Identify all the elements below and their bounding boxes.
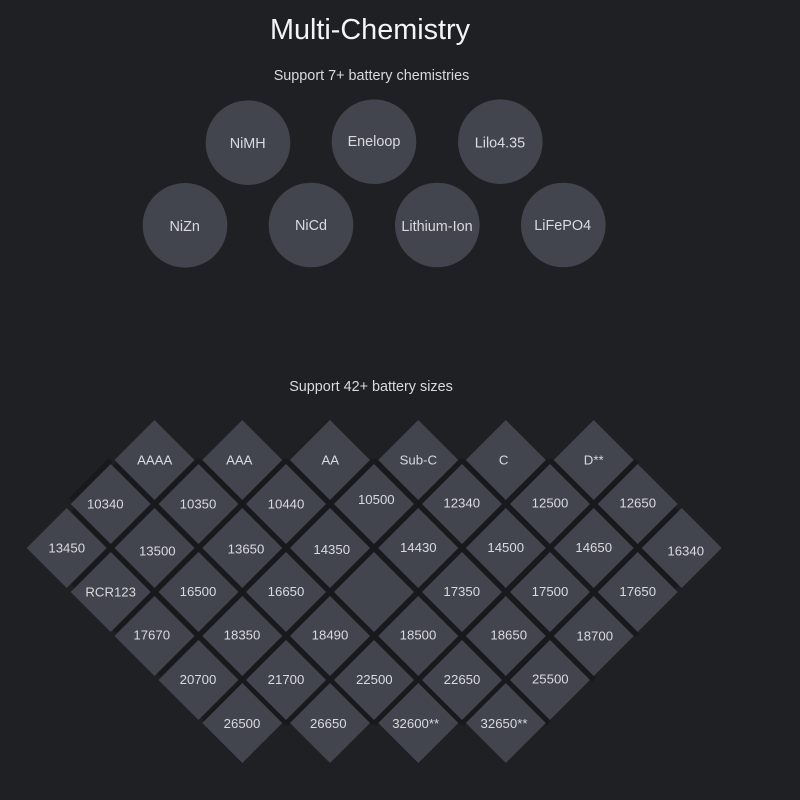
size: 10500: 10500 (358, 492, 395, 507)
size: 16650: 16650 (268, 584, 304, 599)
size: 26650 (290, 683, 370, 763)
size: 18500 (378, 596, 458, 676)
size: 18500: 18500 (400, 628, 436, 642)
size: 16500: 16500 (180, 584, 216, 599)
size: 14350 (290, 508, 370, 588)
size: C (466, 420, 546, 500)
size: 18700 (554, 596, 634, 676)
size: 17650: 17650 (619, 584, 656, 599)
size: 32650**: 32650** (481, 716, 527, 731)
size: 25500: 25500 (532, 672, 569, 686)
title: Multi-Chemistry (270, 14, 471, 46)
circle: NiZn: NiZn (170, 219, 200, 235)
size: AA (290, 420, 370, 500)
panel: battery size diamond grid (27, 420, 722, 763)
size: 18700: 18700 (576, 628, 613, 644)
size: 12650 (598, 464, 678, 544)
size: 10440: 10440 (268, 496, 304, 512)
blank diamond (334, 552, 414, 632)
circle: Lithium-Ion: Lithium-Ion (401, 219, 473, 235)
size: Sub-C: Sub-C (400, 452, 437, 468)
subtitle: sizes: Support 42+ battery sizes (289, 379, 453, 395)
size: 13650: 13650 (228, 542, 264, 556)
size: 10350: 10350 (180, 496, 216, 512)
size: 14650 (554, 508, 634, 588)
size: 10340: 10340 (87, 496, 124, 512)
size: 32600** (378, 683, 458, 763)
size: 13650 (202, 508, 282, 588)
circle: LiFePO4: LiFePO4 (534, 218, 591, 234)
size: AAAA: AAAA (137, 452, 172, 468)
size: 14350: 14350 (313, 542, 350, 557)
circle: Eneloop (332, 99, 416, 184)
size: AAA: AAA (226, 452, 253, 468)
size: 12500 (510, 464, 590, 544)
size: 12340 (422, 464, 502, 544)
size: 10350 (158, 464, 238, 544)
size: 13500 (114, 508, 194, 588)
size: 10340 (71, 464, 151, 544)
size: 21700 (246, 640, 326, 720)
circle: NiZn (143, 183, 227, 268)
size: 32600**: 32600** (392, 716, 439, 731)
size: 17670 (114, 596, 194, 676)
size: 26500 (202, 683, 282, 763)
circle: NiMH: NiMH (230, 136, 266, 152)
size: 18650: 18650 (490, 628, 527, 642)
size: 16650 (246, 552, 326, 632)
circle: Lilo4.35: Lilo4.35 (475, 136, 525, 152)
size: 16500 (158, 552, 238, 632)
size: 22650 (422, 640, 502, 720)
size: 18490 (290, 596, 370, 676)
size: 17500: 17500 (532, 584, 568, 599)
size: 32650** (466, 683, 546, 763)
panel: chemistry circles (143, 99, 606, 268)
size: D** (554, 420, 634, 500)
size: 17650 (598, 552, 678, 632)
subtitle: chemistries: Support 7+ battery chemistries (274, 68, 469, 84)
size: 20700 (158, 640, 238, 720)
size: RCR123: RCR123 (85, 584, 136, 600)
size: 13450 (27, 508, 107, 588)
size: 14430: 14430 (400, 540, 437, 555)
size: 25500 (510, 640, 590, 720)
size: 12500: 12500 (532, 496, 568, 510)
circle: NiCd: NiCd (295, 218, 327, 234)
size: 18350: 18350 (224, 628, 260, 642)
size: C: C (499, 452, 509, 468)
size: 14500: 14500 (487, 540, 524, 555)
size: 17350 (422, 552, 502, 632)
size: 14500 (466, 508, 546, 588)
circle: NiCd (269, 183, 353, 267)
size: 26650: 26650 (310, 716, 347, 731)
size: 18490: 18490 (312, 628, 348, 642)
size: 14430 (378, 508, 458, 588)
size: 26500: 26500 (224, 716, 260, 731)
size: AAAA (114, 420, 194, 500)
size: 22500: 22500 (356, 672, 393, 687)
size: 17350: 17350 (443, 584, 480, 599)
size: 20700: 20700 (180, 672, 216, 687)
size: 16340: 16340 (667, 544, 704, 558)
size: AA: AA (322, 452, 339, 468)
size: 16340 (642, 508, 722, 588)
size: 17670: 17670 (133, 628, 170, 642)
size: 12650: 12650 (619, 496, 656, 510)
size: 12340: 12340 (443, 496, 480, 510)
size: AAA (202, 420, 282, 500)
size: D**: D** (584, 452, 604, 468)
size: RCR123 (71, 552, 151, 632)
size: 21700: 21700 (268, 672, 304, 687)
circle: Eneloop: Eneloop (348, 134, 400, 150)
size: 18650 (466, 596, 546, 676)
size: 10440 (246, 464, 326, 544)
circle: NiMH (206, 100, 290, 185)
circle: Lithium-Ion (395, 183, 480, 267)
size: 22500 (334, 640, 414, 720)
size: 13500: 13500 (139, 544, 176, 558)
circle: Lilo4.35 (458, 99, 543, 184)
size: 18350 (202, 596, 282, 676)
size: Sub-C (378, 420, 458, 500)
size: 10500 (334, 464, 414, 544)
size: 22650: 22650 (444, 672, 480, 687)
size: 13450: 13450 (48, 540, 85, 556)
size: 14650: 14650 (575, 540, 612, 555)
circle: LiFePO4 (521, 183, 606, 267)
size: 17500 (510, 552, 590, 632)
